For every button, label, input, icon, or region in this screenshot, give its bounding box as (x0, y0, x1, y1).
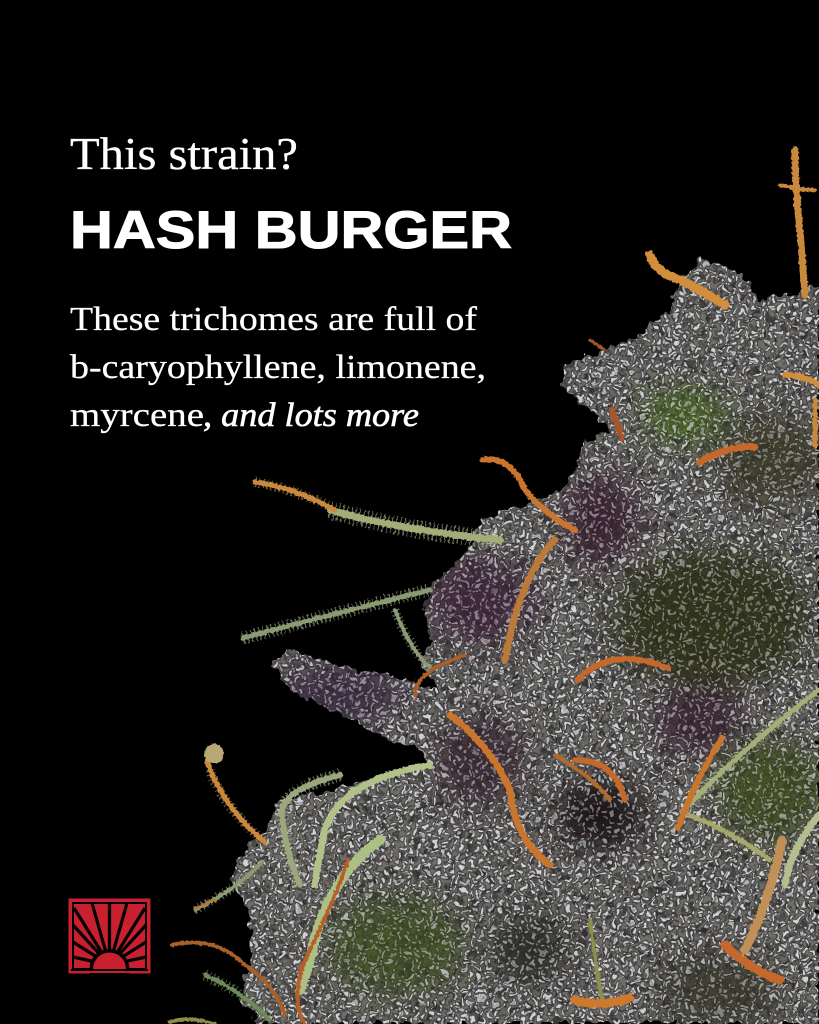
plant photo: cannabis bud (167, 146, 819, 1024)
pistils and leaves (170, 150, 819, 1024)
intro line: This strain? (70, 129, 298, 179)
logo: red rising sun (70, 900, 150, 989)
description text: myrcene (70, 397, 204, 434)
bud body with trichomes (230, 256, 819, 1024)
leaf hairs (195, 482, 819, 1020)
pistil tip knob (204, 744, 224, 764)
description text: These trichomes are full of (70, 301, 478, 338)
description text: , and lots more (203, 397, 419, 434)
green leaf tips (195, 510, 819, 1020)
strain name heading: HASH BURGER (70, 201, 512, 260)
description text (70, 301, 486, 434)
infographic canvas (68, 137, 819, 1024)
description text: b-caryophyllene, limonene, (70, 349, 486, 386)
orange pistils (170, 150, 819, 1024)
